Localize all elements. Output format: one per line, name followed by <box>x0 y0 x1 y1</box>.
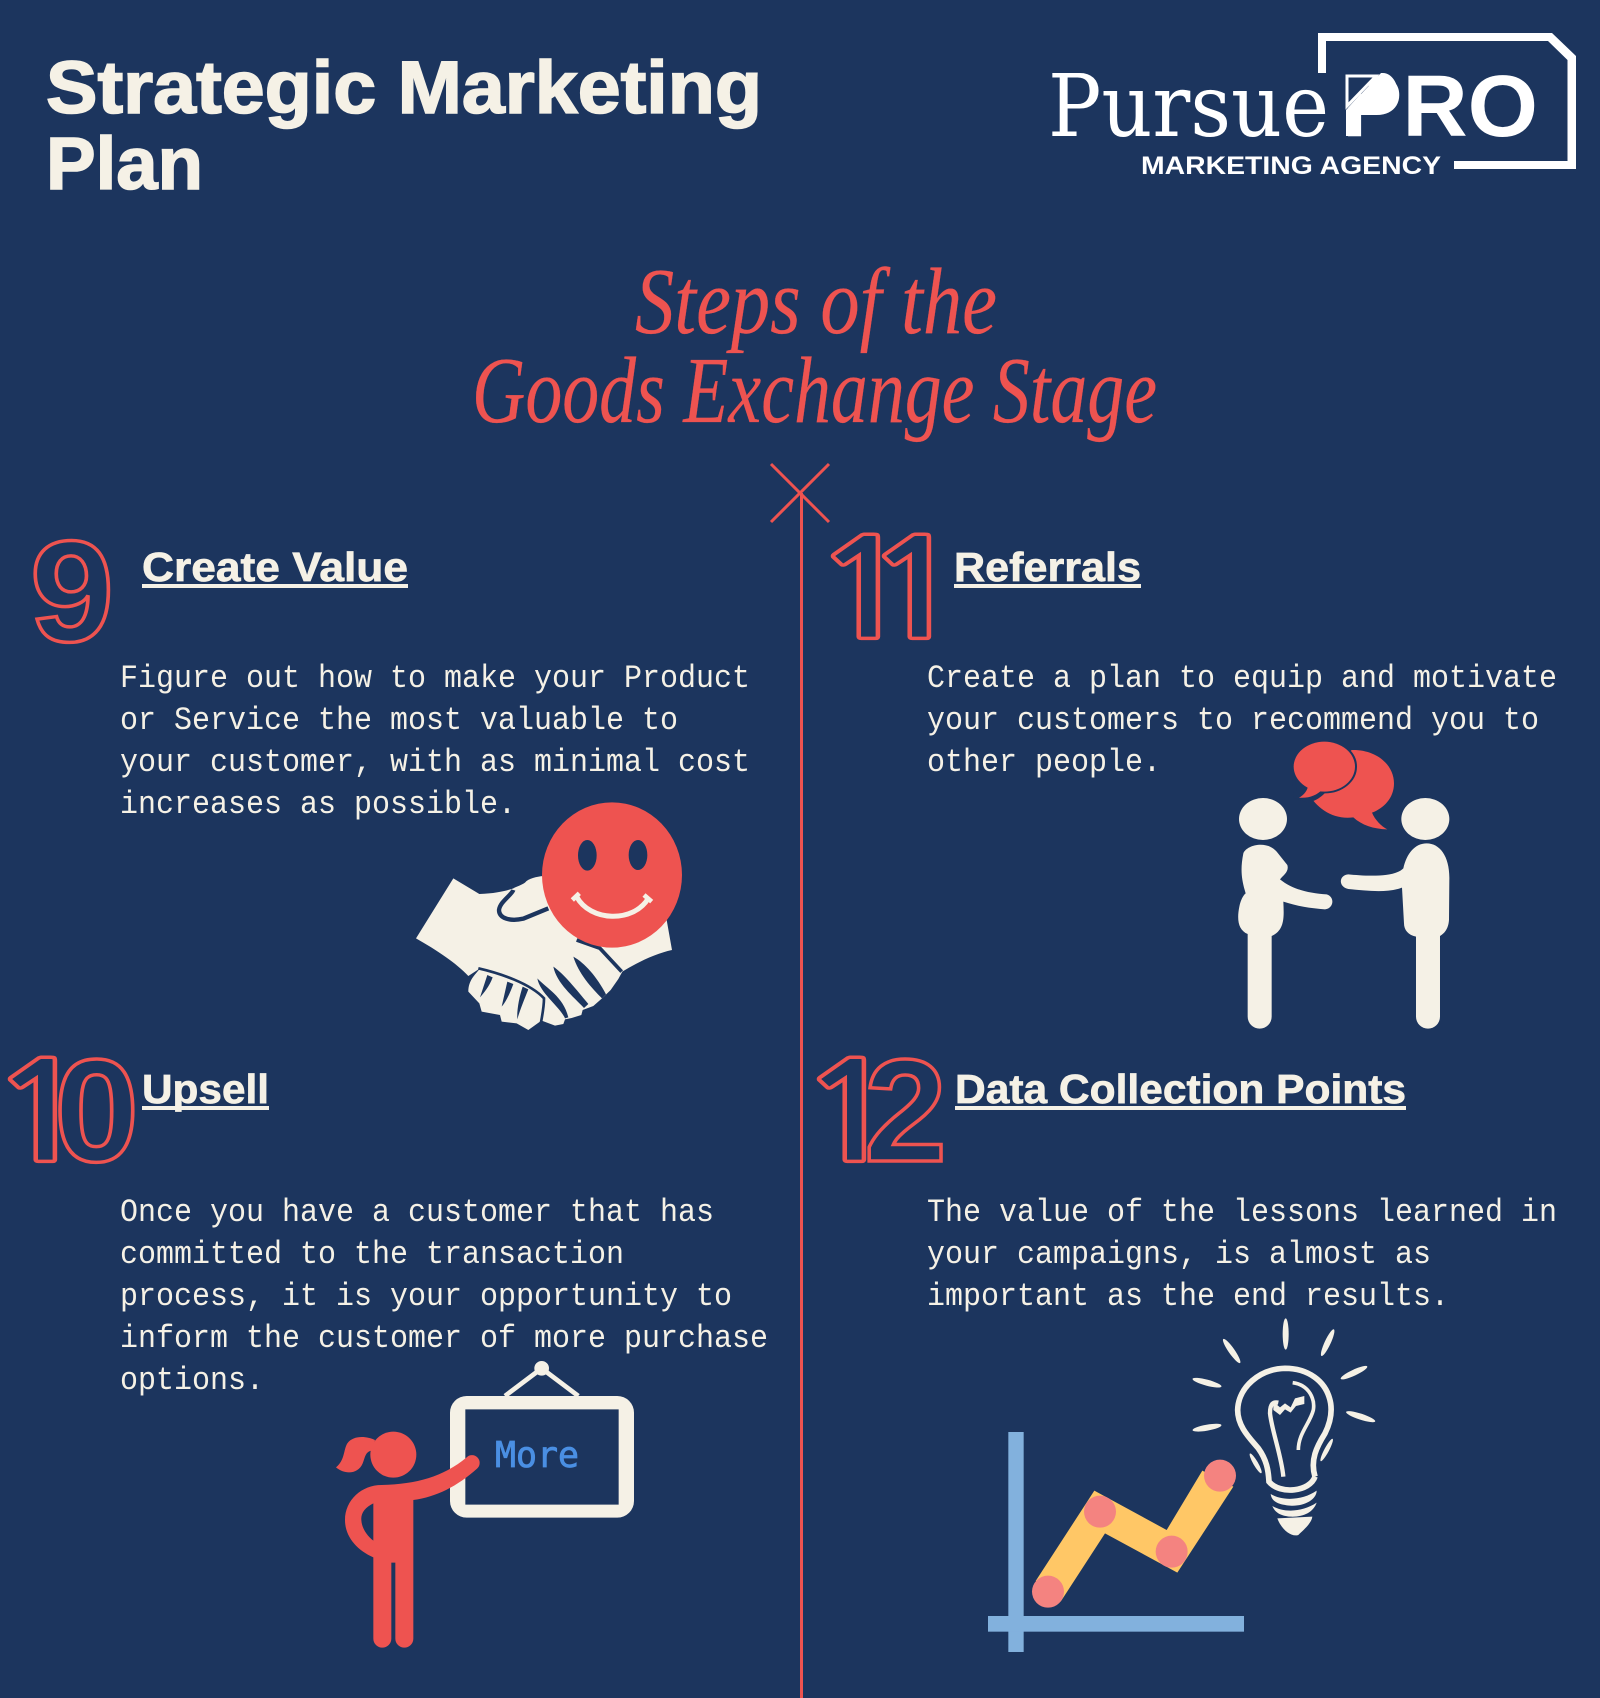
icon: handshake with smiley <box>416 802 682 1030</box>
number 11: 1 <box>810 524 919 659</box>
icon: rising line chart <box>988 1432 1244 1652</box>
body text: create value: or Service the most valuable to <box>120 702 678 739</box>
icon: person pointing at sign reading More: More <box>495 1435 579 1476</box>
panel: step 12 data collection points <box>796 1029 1557 1652</box>
icon: light bulb <box>1192 1318 1376 1535</box>
title <box>46 46 762 205</box>
body text: referrals: Create a plan to equip and motivate <box>927 660 1557 697</box>
panel: step 9 create value <box>30 511 750 1030</box>
body text: data collection points: The value of the lessons learned in <box>927 1194 1557 1231</box>
body text: upsell: options. <box>120 1362 264 1399</box>
logo: PursuePRO Marketing Agency <box>1048 33 1576 180</box>
body text: create value <box>120 660 750 823</box>
subtitle: steps of the goods exchange stage: Steps of the <box>635 250 997 354</box>
body text: create value: increases as possible. <box>120 786 516 823</box>
number 12 <box>796 1029 947 1192</box>
logo: PursuePRO Marketing Agency: Pursue <box>1048 57 1329 157</box>
body text: upsell <box>120 1194 768 1399</box>
heading: referrals: Referrals <box>954 544 1141 590</box>
body text: upsell: committed to the transaction <box>120 1236 624 1273</box>
subtitle: steps of the goods exchange stage <box>472 250 1157 443</box>
title: Strategic Marketing <box>46 46 762 129</box>
heading: create value: Create Value <box>142 544 408 590</box>
panel: step 11 referrals <box>810 524 1557 1029</box>
heading: data collection points: Data Collection Points <box>955 1066 1406 1112</box>
body text: referrals <box>927 660 1557 781</box>
number 12: 2 <box>864 1029 947 1192</box>
body text: upsell: Once you have a customer that has <box>120 1194 714 1231</box>
number 12: 1 <box>796 1047 905 1182</box>
body text: referrals: your customers to recommend you to <box>927 702 1539 739</box>
body text: create value: Figure out how to make your Product <box>120 660 750 697</box>
logo: PursuePRO Marketing Agency: PRO <box>1342 58 1538 155</box>
number 11: 1 <box>861 524 970 659</box>
panel: step 10 upsell <box>0 1029 768 1648</box>
body text: data collection points: important as the end results. <box>927 1278 1449 1315</box>
body text: data collection points <box>927 1194 1557 1315</box>
body text: referrals: other people. <box>927 744 1161 781</box>
body text: data collection points: your campaigns, is almost as <box>927 1236 1431 1273</box>
body text: create value: your customer, with as minimal cost <box>120 744 750 781</box>
number 11 <box>810 524 970 659</box>
number 10: 0 <box>54 1029 139 1192</box>
body text: upsell: process, it is your opportunity to <box>120 1278 732 1315</box>
body text: upsell: inform the customer of more purchase <box>120 1320 768 1357</box>
subtitle: steps of the goods exchange stage: Goods Exchange Stage <box>472 339 1157 443</box>
center divider line with cross <box>771 464 829 1698</box>
number 9: 9 <box>30 511 114 672</box>
title: Plan <box>46 122 203 205</box>
number 10 <box>0 1029 139 1192</box>
icon: two people talking <box>1238 741 1449 1029</box>
icon: person pointing at sign reading More <box>336 1361 634 1648</box>
logo: PursuePRO Marketing Agency: MARKETING AGENCY <box>1141 152 1441 180</box>
heading: upsell: Upsell <box>142 1066 269 1112</box>
